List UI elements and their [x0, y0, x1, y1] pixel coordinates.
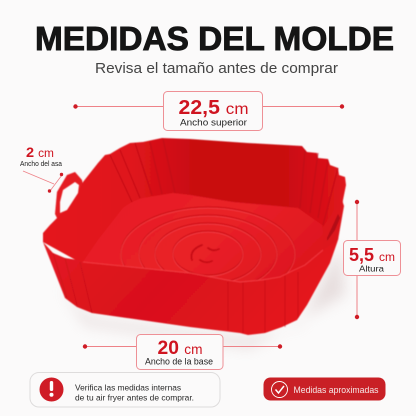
dimension: handle width: 2 cm: [26, 144, 54, 160]
badge: approximate measurements: [264, 378, 386, 400]
dimension: upper width: Ancho superior: [180, 118, 247, 128]
icon: warning: [40, 378, 64, 402]
handle: right: [323, 200, 344, 252]
floor with rings: [84, 192, 323, 282]
dimension: base width: 20 cm: [158, 338, 202, 359]
dimension: handle width: Ancho del asa: [20, 161, 62, 168]
silicone tray: [43, 138, 350, 335]
dimension: upper width: [73, 92, 344, 130]
front wall: [43, 240, 338, 335]
dimension: upper width: 22,5 cm: [178, 97, 248, 119]
callout: verify measurements: Verifica las medidas internas: [75, 382, 181, 392]
dimension: height: Altura: [359, 264, 384, 274]
callout: verify measurements: de tu air fryer antes de comprar.: [75, 392, 194, 402]
tray shadow: [60, 245, 345, 348]
dimension: base width: [83, 334, 282, 370]
subtitle: Revisa el tamaño antes de comprar: [95, 60, 338, 77]
wall ridges: [110, 139, 338, 225]
front wall ridges: [53, 253, 298, 333]
front rim highlight: [83, 250, 323, 282]
dimension: base width: Ancho de la base: [145, 356, 213, 366]
dimension: height: [344, 200, 400, 319]
badge: approximate measurements: Medidas aproximadas: [294, 385, 379, 395]
dimension: handle width: [20, 144, 63, 193]
tray inner walls: [43, 138, 346, 283]
callout: verify measurements: [30, 372, 220, 407]
floor logo: [191, 245, 219, 262]
icon: check: [272, 382, 288, 398]
dimension: height: 5,5 cm: [349, 245, 395, 265]
title: MEDIDAS DEL MOLDE: [35, 21, 394, 58]
handle: left: [55, 172, 84, 220]
